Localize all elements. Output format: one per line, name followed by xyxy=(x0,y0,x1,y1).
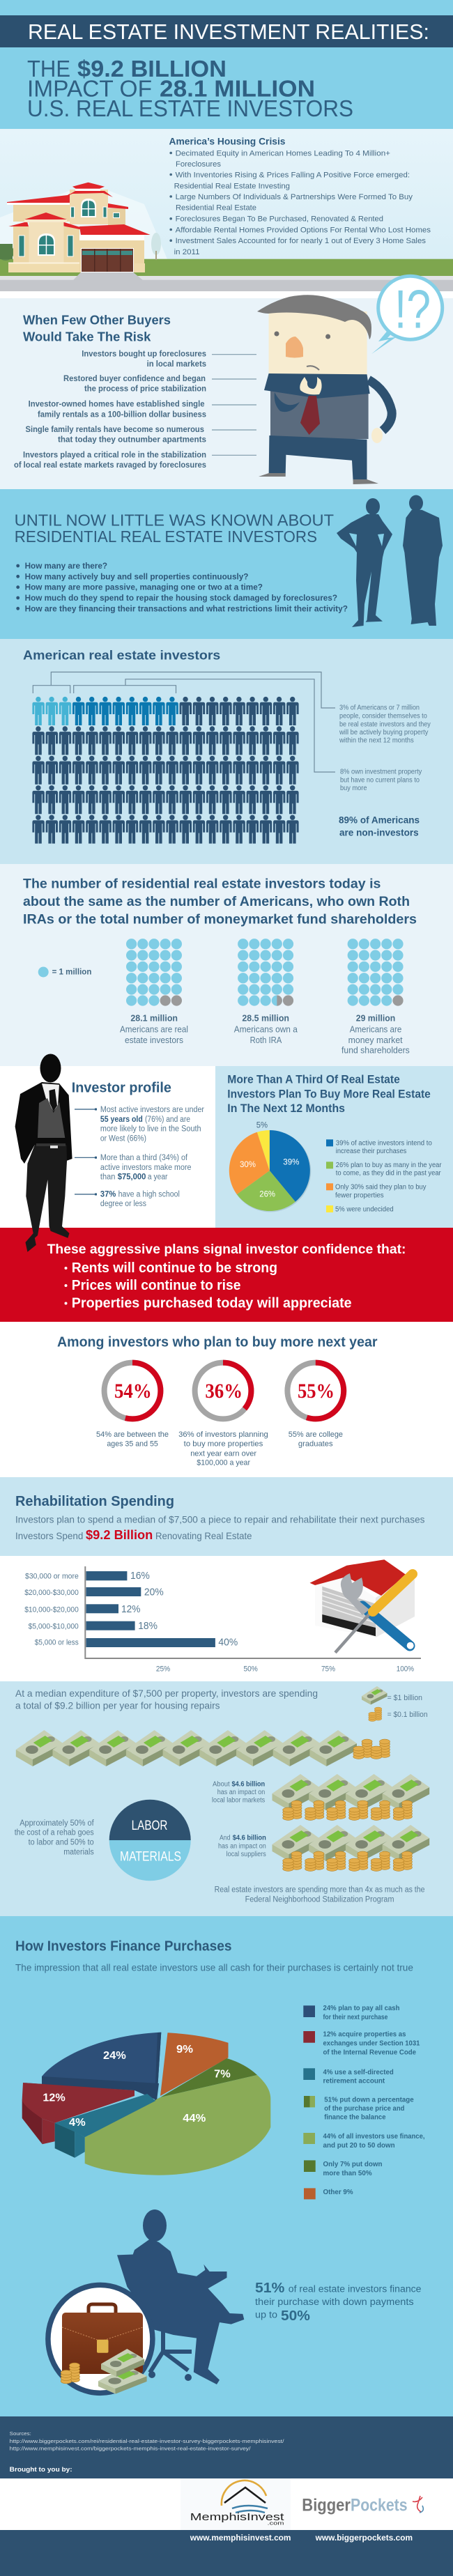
text: income: than xyxy=(100,1173,115,1182)
text: 51% finance with down payments: 51% xyxy=(255,2281,285,2296)
heading: until now little was known xyxy=(15,511,334,546)
pictogram: $9.2 billion in cash xyxy=(16,1730,390,1766)
panel: footer urls xyxy=(0,2530,453,2576)
bar chart: spend distribution: $10,000-$20,000 xyxy=(24,1605,79,1614)
list: unanswered questions: How are they financing their transactions and what restrictions limit their activity? xyxy=(25,603,348,613)
list: investor contributions with leader lines: that today they outnumber apartments xyxy=(58,435,206,445)
3d pie chart: financing: 7% xyxy=(214,2069,231,2081)
dot chart: real estate investors xyxy=(120,939,188,1045)
dot chart: money market: money market xyxy=(348,1035,403,1045)
dot chart: roth ira xyxy=(234,939,298,1045)
silhouette: businessman in suit xyxy=(15,1054,72,1252)
bar chart: spend distribution: 75% xyxy=(321,1665,335,1674)
pie chart: buying plans: 26% xyxy=(259,1189,275,1198)
list: investor contributions with leader lines: Investors bought up foreclosures xyxy=(82,350,206,359)
dot chart: money market xyxy=(341,939,410,1056)
legend: buying plans: fewer properties xyxy=(335,1191,384,1199)
text: labor and materials split xyxy=(15,1819,94,1856)
list: confidence points: Properties purchased today will appreciate xyxy=(72,1296,352,1311)
bar chart: spend distribution: $20,000-$30,000 xyxy=(24,1589,79,1597)
list: crisis bullets: Residential Real Estate xyxy=(176,204,256,213)
callout: labor markets $4.6 billion: has an impact on xyxy=(217,1789,265,1796)
list: confidence points: Prices will continue to rise xyxy=(72,1278,240,1293)
text: sources: Sources: xyxy=(10,2430,31,2437)
dot chart: roth ira: Roth IRA xyxy=(250,1035,282,1045)
heading: more than a third: In The Next 12 Months xyxy=(227,1102,345,1115)
dot chart: real estate investors: estate investors xyxy=(125,1035,183,1045)
chart: labor and materials circle: MATERIALS xyxy=(120,1850,181,1865)
list: crisis bullets xyxy=(169,149,431,256)
icon: briefcase with money in circle xyxy=(48,2285,153,2394)
legend: buying plans: increase their purchases xyxy=(336,1148,406,1155)
chart: labor and materials circle xyxy=(109,1800,191,1881)
bar chart: spend distribution: 100% xyxy=(397,1665,414,1674)
panel: rehab spending bar chart xyxy=(0,1556,453,1681)
panel: until now little was known xyxy=(0,489,453,639)
list: crisis bullets: Large Numbers Of Individuals & Partnerships Were Formed To Buy xyxy=(176,193,413,201)
dot chart: roth ira: Americans own a xyxy=(234,1024,298,1034)
text: 51% finance with down payments xyxy=(255,2281,421,2324)
text: labor and materials split: Approximately 50% of xyxy=(20,1819,94,1828)
3d pie chart: financing: 4% xyxy=(69,2117,86,2129)
heading: number of residential investors xyxy=(23,877,417,927)
list: investor contributions with leader lines: the process of price stabilization xyxy=(84,384,206,393)
subtitle: the $9.2 billion impact: 28.1 MILLION xyxy=(160,76,315,102)
legend: financing: more than 50% xyxy=(323,2169,372,2177)
text: income: a year xyxy=(148,1173,168,1182)
list: crisis bullets: in 2011 xyxy=(174,248,199,256)
donut: 36 percent: $100,000 a year xyxy=(197,1459,250,1467)
panel: title header xyxy=(0,0,453,129)
legend: financing: 24% plan to pay all cash xyxy=(323,2004,399,2012)
legend: buying plans: to come, as they did in the past year xyxy=(336,1170,441,1178)
legend: one dot equals one million: = 1 million xyxy=(52,968,91,976)
text: median expenditure xyxy=(15,1688,318,1711)
text: education: have a high school xyxy=(118,1190,180,1198)
text: median expenditure: a total of $9.2 billion per year for housing repairs xyxy=(15,1700,220,1711)
legend: financing: 12% acquire properties as xyxy=(323,2030,406,2038)
callout: 3% of americans: will be actively buying property xyxy=(339,729,428,736)
bracket lines connecting groups to callouts xyxy=(33,672,335,772)
heading: more than a third xyxy=(227,1073,431,1115)
dot chart: real estate investors: Americans are real xyxy=(120,1024,188,1034)
list: crisis bullets: Investment Sales Accounted for for nearly 1 out of Every 3 Home Sales xyxy=(176,237,426,245)
callout: 89% non-investors: are non-investors xyxy=(339,826,419,838)
text: federal comparison: Federal Neighborhood Stabilization Program xyxy=(245,1896,394,1904)
text: federal comparison xyxy=(215,1886,425,1904)
text: age and region: more likely to live in the South xyxy=(100,1125,201,1134)
legend: buying plans: 26% plan to buy as many in the year xyxy=(336,1162,442,1169)
legend: financing xyxy=(303,2004,425,2199)
legend: cash and coins values: = $1 billion xyxy=(387,1694,422,1702)
heading: until now little was known: RESIDENTIAL REAL ESTATE INVESTORS xyxy=(15,527,317,546)
logo: memphisinvest: .com xyxy=(268,2522,284,2527)
heading: how investors finance purchases: How Investors Finance Purchases xyxy=(15,1938,231,1954)
text: sources xyxy=(10,2430,285,2451)
legend: financing: of the Internal Revenue Code xyxy=(323,2048,416,2056)
title: real estate investment realities: REAL ESTATE INVESTMENT REALITIES: xyxy=(28,20,429,44)
callout: labor markets $4.6 billion xyxy=(212,1774,429,1820)
callout: local suppliers $4.6 billion xyxy=(218,1825,429,1871)
dot chart: money market: Americans are xyxy=(350,1024,401,1034)
heading: when few other buyers would take the risk xyxy=(23,313,171,344)
donut: 36 percent: next year earn over xyxy=(190,1449,256,1458)
panel: number of investors comparison xyxy=(0,864,453,1066)
bar chart: spend distribution: 50% xyxy=(244,1665,258,1674)
text: 51% finance with down payments: their purchase with down payments xyxy=(255,2297,414,2307)
pie chart: buying plans: 30% xyxy=(240,1159,256,1169)
bar chart: spend distribution: 16% xyxy=(130,1570,150,1582)
text: total spend: $9.2 Billion xyxy=(86,1528,153,1542)
logo: memphisinvest xyxy=(181,2478,291,2530)
list: unanswered questions: How many are more passive, managing one or two at a time? xyxy=(25,583,263,592)
donut: 36 percent xyxy=(178,1363,268,1467)
list: unanswered questions: How many actively buy and sell properties continuously? xyxy=(25,571,248,581)
panel: investor profile xyxy=(0,1066,215,1228)
panel: plans to buy more pie chart xyxy=(215,1066,453,1228)
legend: buying plans: 39% of active investors intend to xyxy=(336,1139,432,1147)
legend: financing: and put 20 to 50 down xyxy=(323,2141,395,2150)
text: income: $75,000 xyxy=(118,1173,146,1182)
text: income: active investors make more xyxy=(100,1164,191,1172)
donut: 55 percent xyxy=(287,1363,344,1448)
text: total spend xyxy=(15,1528,252,1542)
dot chart: real estate investors: 28.1 million xyxy=(130,1013,178,1023)
callout: 89% non-investors: 89% of Americans xyxy=(339,815,420,826)
callout: 8% own investment property: but have no current plans to xyxy=(340,776,420,784)
text: sources: http://www.biggerpockets.com/rei/residential-real-estate-investor-survey-biggerpockets-memphisinvest/ xyxy=(10,2438,285,2444)
text: labor and materials split: materials xyxy=(63,1848,94,1856)
list: investor contributions with leader lines: Investor-owned homes have established single xyxy=(29,400,205,409)
speech bubble: exclamation and question mark xyxy=(371,276,443,354)
heading: america's housing crisis: America’s Housing Crisis xyxy=(169,135,286,146)
text: 51% finance with down payments: up to xyxy=(255,2310,277,2320)
bar chart: spend distribution: 18% xyxy=(138,1620,158,1632)
text: age and region: (76%) and are xyxy=(145,1116,190,1124)
list: crisis bullets: Residential Real Estate Investing xyxy=(174,182,290,190)
heading: when few other buyers would take the risk: Would Take The Risk xyxy=(23,329,151,344)
heading: when few other buyers would take the risk: When Few Other Buyers xyxy=(23,313,171,327)
subtitle: the $9.2 billion impact xyxy=(27,56,353,121)
legend: buying plans xyxy=(326,1139,442,1213)
panel: america's housing crisis xyxy=(0,129,453,291)
text: median spend: Investors plan to spend a median of $7,500 a piece to repair and rehabilitate their next purchases xyxy=(15,1514,425,1525)
legend: financing: 44% of all investors use finance, xyxy=(323,2132,425,2141)
heading: investor profile: Investor profile xyxy=(72,1081,171,1096)
logo: memphisinvest: MemphisInvest xyxy=(190,2511,285,2523)
text: age and region xyxy=(100,1106,204,1143)
list: crisis bullets: Decimated Equity in American Homes Leading To 4 Million+ xyxy=(176,149,390,157)
legend: financing: retirement account xyxy=(323,2077,385,2085)
donut: 54 percent: 54% xyxy=(114,1380,152,1403)
silhouette: seated man taking notes xyxy=(117,2209,244,2384)
bar chart: spend distribution: $5,000-$10,000 xyxy=(29,1623,79,1631)
legend: financing: of the purchase price and xyxy=(324,2104,404,2113)
text: education: degree or less xyxy=(100,1200,146,1208)
bar chart: spend distribution: 20% xyxy=(144,1586,164,1598)
text: cash impression: The impression that all real estate investors use all cash for their purchases is certainly not true xyxy=(15,1961,413,1973)
heading: rehabilitation spending: Rehabilitation Spending xyxy=(15,1494,174,1509)
panel: sponsor logos xyxy=(0,2478,453,2530)
list: confidence points: Rents will continue to be strong xyxy=(72,1260,277,1276)
legend: financing: exchanges under Section 1031 xyxy=(323,2039,420,2047)
logo: biggerpockets: Bigger xyxy=(302,2496,351,2515)
3d pie chart: financing: 12% xyxy=(43,2092,66,2104)
heading: more than a third: Investors Plan To Buy More Real Estate xyxy=(227,1088,431,1100)
heading: until now little was known: UNTIL NOW LITTLE WAS KNOWN ABOUT xyxy=(15,511,334,529)
bar chart: spend distribution: 40% xyxy=(218,1637,238,1649)
list: crisis bullets: Foreclosures Began To Be Purchased, Renovated & Rented xyxy=(176,215,383,224)
callout: 8% own investment property xyxy=(340,769,422,792)
list: confidence points xyxy=(64,1260,352,1311)
list: investor contributions with leader lines: family rentals as a 100-billion dollar business xyxy=(38,410,206,419)
callout: 3% of americans xyxy=(339,704,431,745)
panel: housing repair spend xyxy=(0,1681,453,1916)
panel: when few other buyers xyxy=(0,276,453,489)
legend: buying plans: 5% were undecided xyxy=(335,1205,394,1213)
callout: 3% of americans: people, consider themselves to xyxy=(339,713,427,720)
3d pie chart: financing: 9% xyxy=(176,2044,193,2056)
heading: more than a third: More Than A Third Of Real Estate xyxy=(227,1073,400,1086)
donut: 54 percent: 54% are between the xyxy=(96,1430,169,1439)
text: education xyxy=(100,1190,180,1208)
list: investor contributions with leader lines: Single family rentals have become so numerous xyxy=(25,425,204,434)
legend: cash and coins values: = $0.1 billion xyxy=(387,1711,428,1719)
link text: biggerpockets url: www.biggerpockets.com xyxy=(315,2534,413,2543)
subtitle: the $9.2 billion impact: THE xyxy=(27,56,70,82)
donut: 36 percent: 36% of investors planning xyxy=(178,1430,268,1439)
donut: 36 percent: to buy more properties xyxy=(184,1440,263,1448)
3d pie chart: financing xyxy=(22,2033,270,2175)
panel: how investors finance purchases xyxy=(0,1916,453,2416)
list: investor contributions with leader lines: Restored buyer confidence and began xyxy=(63,374,206,383)
bar chart: spend distribution: $5,000 or less xyxy=(35,1639,79,1647)
donut: 54 percent: ages 35 and 55 xyxy=(107,1440,158,1448)
heading: number of residential investors: The number of residential real estate investors today is xyxy=(23,877,381,892)
text: 51% finance with down payments: 50% xyxy=(281,2308,310,2324)
legend: financing: Other 9% xyxy=(323,2188,353,2196)
panel: investor confidence red band xyxy=(0,1228,453,1322)
callout: local suppliers $4.6 billion: local suppliers xyxy=(227,1851,266,1858)
callout: local suppliers $4.6 billion: has an impact on xyxy=(218,1842,266,1850)
subtitle: the $9.2 billion impact: U.S. REAL ESTATE INVESTORS xyxy=(27,95,353,121)
pie chart: buying plans xyxy=(229,1120,311,1212)
illustration: house xyxy=(0,183,161,291)
text: income xyxy=(100,1154,191,1182)
list: unanswered questions xyxy=(16,561,348,613)
legend: financing: for their next purchase xyxy=(323,2013,388,2021)
legend: buying plans: Only 30% said they plan to buy xyxy=(335,1184,427,1191)
list: investor contributions with leader lines: in local markets xyxy=(147,360,206,369)
text: total spend: Renovating Real Estate xyxy=(155,1530,252,1541)
heading: number of residential investors: about the same as the number of Americans, who own Roth xyxy=(23,895,410,909)
dot chart: money market: 29 million xyxy=(356,1013,395,1023)
text: brought to you by: Brought to you by: xyxy=(10,2466,72,2474)
donut: 55 percent: 55% xyxy=(298,1380,335,1403)
link text: memphisinvest url: www.memphisinvest.com xyxy=(190,2534,291,2543)
legend: financing: Only 7% put down xyxy=(323,2160,382,2168)
list: investor contributions with leader lines: of local real estate markets ravaged by foreclosures xyxy=(14,461,206,470)
icon: house with wrench and screwdriver xyxy=(309,1559,415,1653)
list: unanswered questions: How much do they spend to repair the housing stock damaged by foreclosures? xyxy=(25,593,337,603)
heading: aggressive plans: These aggressive plans signal investor confidence that: xyxy=(47,1242,406,1257)
panel: footer sources xyxy=(0,2416,453,2478)
callout: 3% of americans: within the next 12 months xyxy=(339,737,414,745)
callout: 3% of americans: 3% of Americans or 7 million xyxy=(339,704,420,712)
callout: 8% own investment property: 8% own investment property xyxy=(340,769,422,776)
heading: number of residential investors: IRAs or the total number of moneymarket fund shareholders xyxy=(23,912,417,927)
text: total spend: Investors Spend xyxy=(15,1530,83,1541)
pie chart: buying plans: 39% xyxy=(283,1157,300,1167)
bar chart: spend distribution: $30,000 or more xyxy=(25,1573,79,1581)
dot chart: money market: fund shareholders xyxy=(341,1046,410,1056)
callout: 89% non-investors xyxy=(339,815,420,838)
text: age and region: or West (66%) xyxy=(100,1135,146,1143)
donut: 55 percent: graduates xyxy=(298,1440,333,1448)
text: age and region: Most active investors are under xyxy=(100,1106,204,1114)
panel: rehabilitation spending header xyxy=(0,1477,453,1556)
list: investor contributions with leader lines: Investors played a critical role in the stabilization xyxy=(23,451,206,460)
callout: 3% of americans: be real estate investors and they xyxy=(339,720,431,728)
heading: among investors: Among investors who plan to buy more next year xyxy=(57,1334,378,1350)
3d pie chart: financing: 44% xyxy=(183,2113,206,2124)
bar chart: spend distribution: 25% xyxy=(156,1665,170,1674)
logo: biggerpockets xyxy=(302,2496,423,2515)
logo: biggerpockets: Pockets xyxy=(351,2496,408,2515)
donut: 36 percent: 36% xyxy=(205,1380,243,1403)
list: crisis bullets: With Inventories Rising & Prices Falling A Positive Force emerged: xyxy=(176,171,410,179)
callout: 8% own investment property: buy more xyxy=(340,785,367,792)
panel: american real estate investors xyxy=(0,639,453,864)
text: sources: http://www.memphisinvest.com/biggerpockets-memphis-invest-real-estate-investor-survey/ xyxy=(10,2445,252,2451)
chart: labor and materials circle: LABOR xyxy=(132,1819,167,1833)
text: 51% finance with down payments: of real estate investors finance xyxy=(289,2283,421,2294)
list: investor contributions with leader lines xyxy=(14,350,256,470)
callout: labor markets $4.6 billion: About xyxy=(213,1780,230,1788)
pictogram: 100 people xyxy=(32,697,299,844)
donut: 54 percent xyxy=(96,1363,169,1448)
list: unanswered questions: How many are there? xyxy=(25,561,107,571)
callout: labor markets $4.6 billion: local labor markets xyxy=(212,1796,265,1804)
legend: one dot equals one million xyxy=(38,967,91,977)
text: education: 37% xyxy=(100,1190,116,1198)
text: labor and materials split: the cost of a rehab goes xyxy=(15,1829,94,1837)
list: crisis bullets: Affordable Rental Homes Provided Options For Rental Who Lost Homes xyxy=(176,226,431,234)
callout: local suppliers $4.6 billion: $4.6 billion xyxy=(233,1835,266,1842)
legend: financing: finance the balance xyxy=(324,2113,386,2121)
leader lines xyxy=(75,1108,97,1196)
text: median expenditure: At a median expenditure of $7,500 per property, investors are spending xyxy=(15,1688,318,1699)
callout: local suppliers $4.6 billion: And xyxy=(220,1835,230,1842)
dot chart: roth ira: 28.5 million xyxy=(242,1013,289,1023)
speech bubble: exclamation and question mark: !? xyxy=(394,279,431,340)
donut: 55 percent: 55% are college xyxy=(289,1430,343,1439)
subtitle: the $9.2 billion impact: IMPACT OF xyxy=(27,76,152,102)
legend: cash and coins values xyxy=(362,1686,428,1721)
text: age and region: 55 years old xyxy=(100,1116,143,1124)
3d pie chart: financing: 24% xyxy=(103,2050,126,2062)
subtitle: the $9.2 billion impact: $9.2 BILLION xyxy=(77,56,227,82)
legend: financing: 51% put down a percentage xyxy=(324,2095,414,2104)
callout: labor markets $4.6 billion: $4.6 billion xyxy=(231,1780,265,1788)
bar chart: spend distribution xyxy=(24,1566,421,1674)
heading: american real estate investors: American real estate investors xyxy=(23,648,220,663)
text: income: More than a third (34%) of xyxy=(100,1154,188,1162)
text: labor and materials split: to labor and 50% to xyxy=(29,1839,94,1847)
panel: among investors who plan to buy more xyxy=(0,1322,453,1477)
bar chart: spend distribution: 12% xyxy=(121,1603,141,1615)
legend: financing: 4% use a self-directed xyxy=(323,2068,394,2076)
pie chart: buying plans: 5% xyxy=(256,1120,268,1129)
text: federal comparison: Real estate investors are spending more than 4x as much as the xyxy=(215,1886,425,1895)
list: crisis bullets: Foreclosures xyxy=(176,160,221,169)
illustration: puzzled businessman xyxy=(257,295,392,484)
silhouettes: two standing men xyxy=(337,495,443,627)
